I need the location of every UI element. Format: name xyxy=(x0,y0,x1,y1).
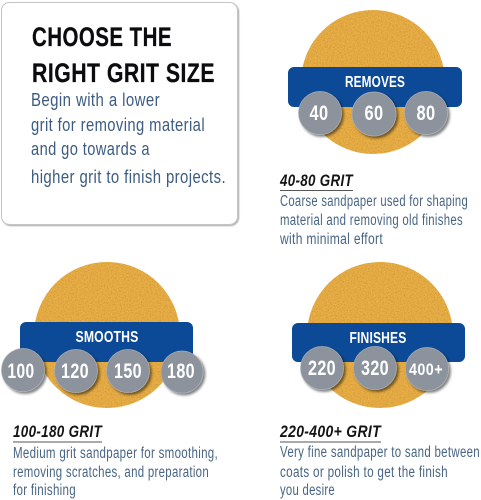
badge: 100 xyxy=(2,348,44,392)
label bar: smooths xyxy=(20,322,193,362)
badge: 180 xyxy=(161,351,203,393)
panel: finishes 220-400+ grit xyxy=(279,262,480,499)
label bar: finishes: FINISHES xyxy=(350,330,407,347)
badge: 80 xyxy=(404,92,448,134)
text block: intro copy: Begin with a lower xyxy=(31,89,160,110)
text block: 100-180 description: removing scratches, and preparation xyxy=(13,464,209,481)
badge: 60 xyxy=(352,92,396,136)
badge: 120 xyxy=(54,350,98,392)
badge: 220 xyxy=(300,346,344,390)
panel: removes 40-80 grit xyxy=(279,10,468,248)
badge: 60: 60 xyxy=(364,102,384,125)
heading: 100-180 grit: 100-180 GRIT xyxy=(13,423,103,441)
icon: sandpaper disc xyxy=(301,10,445,154)
heading: choose the right grit size xyxy=(32,22,215,88)
panel: intro card xyxy=(2,2,238,224)
text block: intro copy: higher grit to finish projects. xyxy=(31,166,226,187)
heading: choose the right grit size: RIGHT GRIT SIZE xyxy=(32,58,215,88)
badge: 400+: 400+ xyxy=(409,360,443,379)
badge: 150 xyxy=(106,350,150,392)
text block: intro copy: and go towards a xyxy=(31,138,150,159)
text block: 220-400+ description xyxy=(280,444,480,499)
badge: 100: 100 xyxy=(8,360,34,383)
text block: 100-180 description: for finishing xyxy=(13,482,76,499)
heading: 40-80 grit: 40-80 GRIT xyxy=(279,172,354,190)
panel: smooths 100-180 grit xyxy=(2,262,218,499)
heading: 220-400+ grit: 220-400+ GRIT xyxy=(279,423,382,441)
text block: intro copy: grit for removing material xyxy=(31,114,205,135)
label bar: removes: REMOVES xyxy=(345,74,405,91)
text block: 220-400+ description: you desire xyxy=(280,482,335,499)
text block: 100-180 description: Medium grit sandpaper for smoothing, xyxy=(13,445,218,462)
badge: 40: 40 xyxy=(310,102,328,125)
label bar: removes xyxy=(288,67,462,107)
badge: 80: 80 xyxy=(416,102,436,125)
text block: 40-80 description xyxy=(279,193,468,248)
badge: 120: 120 xyxy=(61,360,89,383)
label bar: smooths: SMOOTHS xyxy=(76,329,139,346)
badge: 180: 180 xyxy=(167,360,195,383)
icon: sandpaper disc xyxy=(34,262,180,408)
badge: 150: 150 xyxy=(114,360,142,383)
badge: 320 xyxy=(354,346,396,390)
badge: 320: 320 xyxy=(361,357,389,380)
text block: 40-80 description: with minimal effort xyxy=(279,231,383,248)
label bar: finishes xyxy=(292,323,465,362)
text block: intro copy xyxy=(31,89,226,187)
heading: choose the right grit size: CHOOSE THE xyxy=(32,22,172,52)
badge: 400+ xyxy=(406,348,448,390)
badge: 40 xyxy=(298,92,342,134)
badge: 220: 220 xyxy=(308,357,336,380)
text block: 100-180 description xyxy=(13,445,218,499)
icon: sandpaper disc xyxy=(307,262,453,408)
